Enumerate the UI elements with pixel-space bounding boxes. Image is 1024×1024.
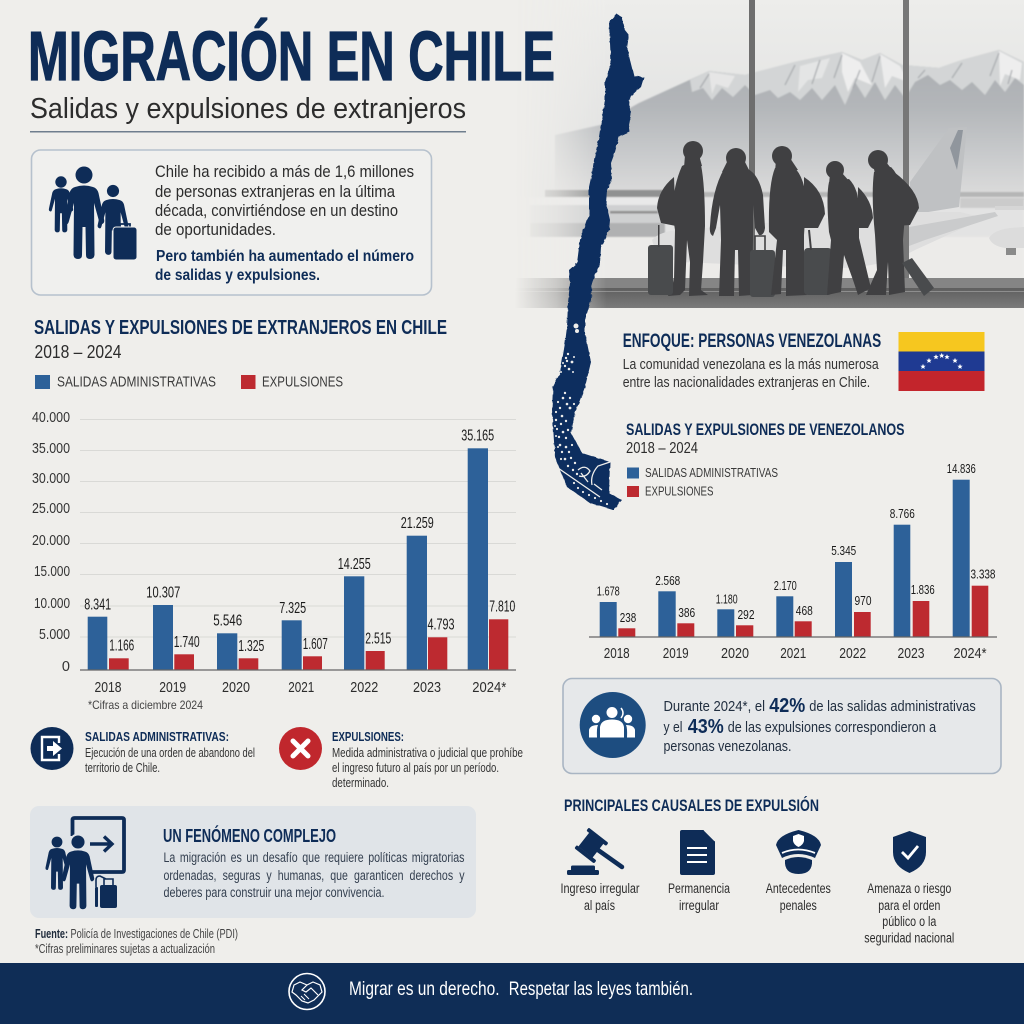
text block: introduction: Chile ha recibido a más de 1,6 millones: [155, 163, 414, 181]
source note: [35, 927, 238, 956]
value labels: 386: [678, 605, 695, 620]
section: principales causales de expulsión: PRINCIPALES CAUSALES DE EXPULSIÓN: [564, 796, 819, 815]
x axis labels: 2018: [604, 645, 630, 662]
x axis labels: 2019: [663, 645, 689, 662]
travellers silhouettes: [648, 141, 934, 297]
x axis labels: 2020: [721, 645, 749, 662]
text block: introduction: de oportunidades.: [155, 221, 276, 239]
definition: expulsiones: EXPULSIONES:: [332, 729, 404, 744]
person 2 with suitcase: [710, 148, 775, 297]
cause: permanencia irregular: [668, 830, 730, 913]
panel: un fenómeno complejo: La migración es un desafío que requiere políticas migratorias: [164, 850, 465, 865]
cause: permanencia irregular: irregular: [679, 898, 719, 913]
chart footnote: *Cifras a diciembre 2024: [88, 698, 203, 712]
value labels: 1.166: [109, 638, 134, 654]
photo: airport window with travellers: [515, 0, 1024, 308]
definition: salidas administrativas: SALIDAS ADMINISTRATIVAS:: [85, 729, 229, 744]
text block: percentages: personas venezolanas.: [664, 738, 792, 755]
value labels: 1.678: [597, 584, 620, 598]
y axis labels: 10.000: [34, 596, 70, 612]
section: principales causales de expulsión: [560, 796, 954, 946]
definition: salidas administrativas: territorio de Chile.: [85, 761, 160, 775]
y axis labels: 30.000: [32, 471, 70, 487]
value labels: 4.793: [428, 616, 454, 634]
text block: percentages: [664, 695, 976, 755]
cause: antecedentes penales: Antecedentes: [766, 881, 831, 896]
value labels: 14.255: [338, 556, 371, 573]
person 1 with suitcase: [648, 141, 708, 296]
value labels: 7.325: [279, 600, 306, 617]
y axis labels: 0: [62, 659, 70, 675]
value labels: 2.515: [365, 630, 391, 648]
value labels: 35.165: [461, 428, 494, 444]
icon: Venezuelan flag: [898, 332, 984, 391]
person 3 with suitcase: [769, 146, 832, 296]
heading: right chart: SALIDAS Y EXPULSIONES DE VENEZOLANOS: [626, 420, 904, 439]
x axis labels: 2022: [350, 679, 378, 696]
cause: ingreso irregular: [560, 828, 640, 913]
y axis labels: 40.000: [32, 410, 70, 426]
legend: left chart: SALIDAS ADMINISTRATIVAS: [57, 374, 216, 390]
value labels: 1.607: [303, 636, 328, 653]
text block: percentages: de las salidas administrativas: [809, 698, 976, 715]
x axis labels: 2021: [780, 645, 806, 662]
y axis labels: 15.000: [34, 564, 70, 580]
value labels: 2.568: [655, 573, 680, 588]
y axis labels: 25.000: [32, 501, 70, 517]
text block: introduction: [155, 163, 414, 284]
value labels: 8.341: [84, 596, 111, 614]
aircraft: [652, 127, 1024, 268]
text block: percentages: y el: [664, 719, 682, 736]
value labels: 2.170: [774, 578, 797, 593]
heading: left chart: SALIDAS Y EXPULSIONES DE EXTRANJEROS EN CHILE: [34, 317, 447, 339]
text block: introduction: de salidas y expulsiones.: [155, 267, 320, 284]
value labels: 10.307: [146, 584, 180, 602]
bar chart: venezolanos: [589, 461, 997, 662]
footer band: Migrar es un derecho.: [349, 979, 500, 1000]
cause: amenaza o riesgo: Amenaza o riesgo: [867, 881, 951, 896]
person 4: [826, 161, 873, 295]
icon: exit door: [30, 727, 74, 770]
legend: right chart: EXPULSIONES: [645, 484, 714, 498]
window sill and floor: [515, 278, 1024, 288]
text block: introduction: Pero también ha aumentado el número: [156, 248, 414, 265]
icon: gavel: [567, 828, 622, 875]
person 5 with rolling suitcase: [866, 150, 934, 296]
value labels: 21.259: [401, 515, 434, 532]
icon: shield with check: [893, 831, 926, 873]
section: enfoque venezolanos: La comunidad venezolana es la más numerosa: [623, 357, 879, 373]
heading: right chart: [626, 420, 904, 457]
definition: salidas administrativas: [30, 727, 255, 775]
value labels: 238: [620, 610, 636, 625]
text block: percentages: 43%: [688, 716, 724, 738]
x axis labels: [94, 679, 506, 696]
icon: family at exit door: [45, 818, 124, 909]
text block: percentages: Durante 2024*, el: [664, 698, 765, 715]
panel: un fenómeno complejo: deberes para construir una mejor convivencia.: [164, 885, 384, 900]
heading: left chart: [34, 317, 447, 362]
icon: family with suitcase: [49, 166, 137, 260]
source note: *Cifras preliminares sujetas a actualización: [35, 942, 215, 956]
text block: percentages: de las expulsiones correspondieron a: [728, 719, 937, 736]
cause: permanencia irregular: Permanencia: [668, 881, 730, 896]
x axis labels: 2018: [94, 679, 122, 696]
x axis labels: 2020: [222, 679, 250, 696]
legend: right chart: [627, 465, 778, 498]
source note: Fuente:: [35, 927, 68, 941]
x axis labels: 2024*: [954, 645, 987, 662]
definition: expulsiones: Medida administrativa o judicial que prohíbe: [332, 746, 523, 760]
cause: amenaza o riesgo: seguridad nacional: [864, 930, 954, 946]
cause: antecedentes penales: penales: [780, 898, 817, 913]
callout: porcentajes 2024: [563, 678, 1001, 774]
panel: un fenómeno complejo: UN FENÓMENO COMPLEJO: [163, 825, 336, 846]
value labels: 1.740: [174, 634, 200, 651]
section: enfoque venezolanos: ENFOQUE: PERSONAS VENEZOLANAS: [623, 331, 881, 352]
value labels: 14.836: [947, 461, 976, 476]
value labels: [84, 428, 516, 655]
x axis labels: [604, 645, 987, 662]
definition: expulsiones: [279, 727, 523, 790]
cause: antecedentes penales: [766, 830, 831, 913]
y axis labels: 35.000: [32, 441, 70, 457]
section: enfoque venezolanos: entre las nacionalidades extranjeras en Chile.: [623, 375, 870, 391]
footer band: Respetar las leyes también.: [509, 979, 693, 1000]
y axis labels: 20.000: [32, 533, 70, 549]
value labels: 1.836: [911, 582, 935, 597]
bar chart: salidas y expulsiones totales: [32, 410, 516, 696]
text block: percentages: 42%: [769, 695, 805, 717]
bars: [600, 480, 988, 637]
map of Chile: [552, 14, 644, 510]
cause: amenaza o riesgo: [864, 831, 954, 946]
title: MIGRACIÓN EN CHILE: [28, 17, 555, 95]
icon: group of people: [580, 692, 646, 758]
heading: left chart: 2018 – 2024: [34, 341, 122, 362]
window mullions: [749, 0, 755, 250]
heading: right chart: 2018 – 2024: [626, 440, 698, 457]
definition: expulsiones: el ingreso futuro al país por un período.: [332, 761, 499, 775]
value labels: 1.325: [238, 638, 264, 655]
cause: ingreso irregular: al país: [584, 898, 615, 913]
panel: introduction: [32, 150, 432, 295]
x axis labels: 2024*: [472, 679, 506, 696]
value labels: 468: [796, 603, 813, 618]
value labels: [597, 461, 996, 625]
legend: left chart: [35, 374, 343, 390]
value labels: 5.546: [213, 612, 242, 630]
x axis labels: 2019: [159, 679, 186, 696]
x axis labels: 2022: [839, 645, 866, 662]
y axis labels: [32, 410, 70, 675]
value labels: 292: [738, 607, 754, 622]
footer band: [0, 963, 1024, 1024]
airfield background: [532, 189, 1024, 238]
cause: ingreso irregular: Ingreso irregular: [560, 881, 640, 896]
value labels: 1.180: [716, 592, 738, 606]
value labels: 970: [854, 593, 872, 608]
mountains: [555, 50, 1024, 192]
definition: salidas administrativas: Ejecución de una orden de abandono del: [85, 746, 255, 760]
value labels: 7.810: [489, 598, 516, 616]
subtitle: Salidas y expulsiones de extranjeros: [30, 93, 466, 125]
cause: amenaza o riesgo: público o la: [882, 914, 937, 929]
definition: expulsiones: determinado.: [332, 776, 389, 790]
x axis labels: 2021: [288, 679, 314, 696]
text block: introduction: década, convirtiéndose en un destino: [155, 202, 398, 220]
bars: [88, 448, 508, 670]
icon: document: [680, 830, 715, 875]
panel: un fenómeno complejo: ordenadas, seguras y humanas, que garanticen derechos y: [164, 868, 465, 883]
x axis labels: 2023: [413, 679, 441, 696]
text block: introduction: de personas extranjeras en la última: [155, 183, 396, 201]
legend: right chart: SALIDAS ADMINISTRATIVAS: [645, 465, 778, 480]
section: enfoque venezolanos: [623, 331, 881, 391]
legend: left chart: EXPULSIONES: [262, 374, 343, 390]
y axis labels: 5.000: [39, 627, 70, 643]
panel: un fenómeno complejo: [30, 806, 476, 918]
source note: Policía de Investigaciones de Chile (PDI): [70, 927, 238, 941]
x axis labels: 2023: [898, 645, 924, 662]
icon: handshake: [289, 974, 325, 1010]
value labels: 3.338: [970, 566, 996, 582]
cause: amenaza o riesgo: para el orden: [878, 898, 940, 913]
value labels: 8.766: [890, 506, 915, 521]
icon: red cross: [279, 727, 322, 770]
value labels: 5.345: [831, 543, 856, 558]
icon: police cap: [776, 830, 821, 874]
